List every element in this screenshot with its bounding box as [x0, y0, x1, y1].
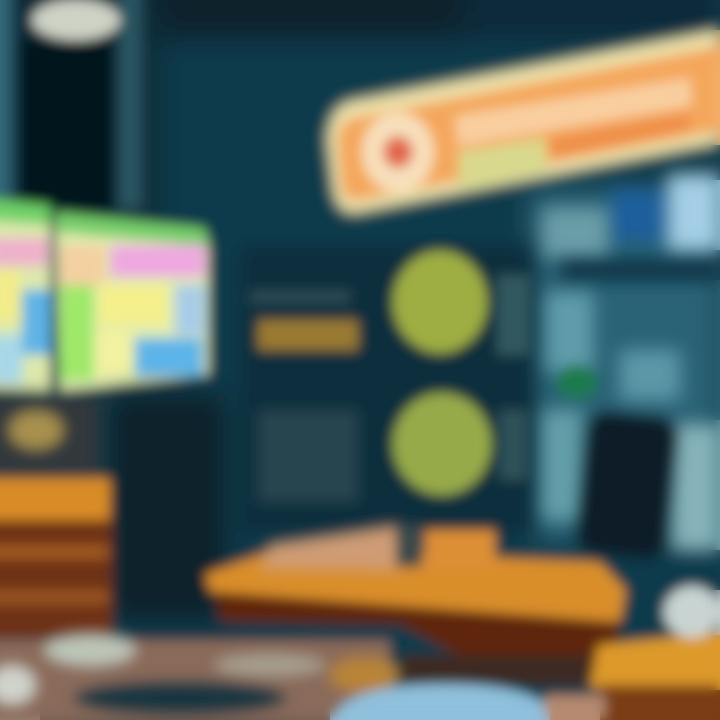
ceiling lamp: [32, 0, 120, 40]
left monitors: [0, 195, 208, 392]
left window column: [0, 0, 142, 210]
dark desk equipment under monitors: [110, 395, 225, 620]
wall panel: [240, 245, 535, 535]
sign logo: [362, 112, 434, 192]
right grey lines: [497, 275, 529, 355]
right corner desk: [590, 586, 720, 720]
lower green circle: [393, 393, 491, 495]
right shelving: [530, 175, 720, 550]
left cabinet: [0, 395, 112, 638]
sign subtitle: [458, 138, 548, 190]
panel orange text: [258, 320, 358, 350]
central wooden desk: [205, 525, 626, 680]
upper green circle: [393, 251, 487, 353]
panel grey text top: [250, 290, 350, 304]
office chair: [575, 410, 679, 560]
orange sign: [326, 28, 720, 214]
floor foreground: [0, 634, 605, 720]
monitor colour blocks: [0, 238, 48, 266]
sign text: [455, 78, 692, 146]
plant: [557, 365, 597, 399]
panel grey text block: [258, 410, 358, 502]
